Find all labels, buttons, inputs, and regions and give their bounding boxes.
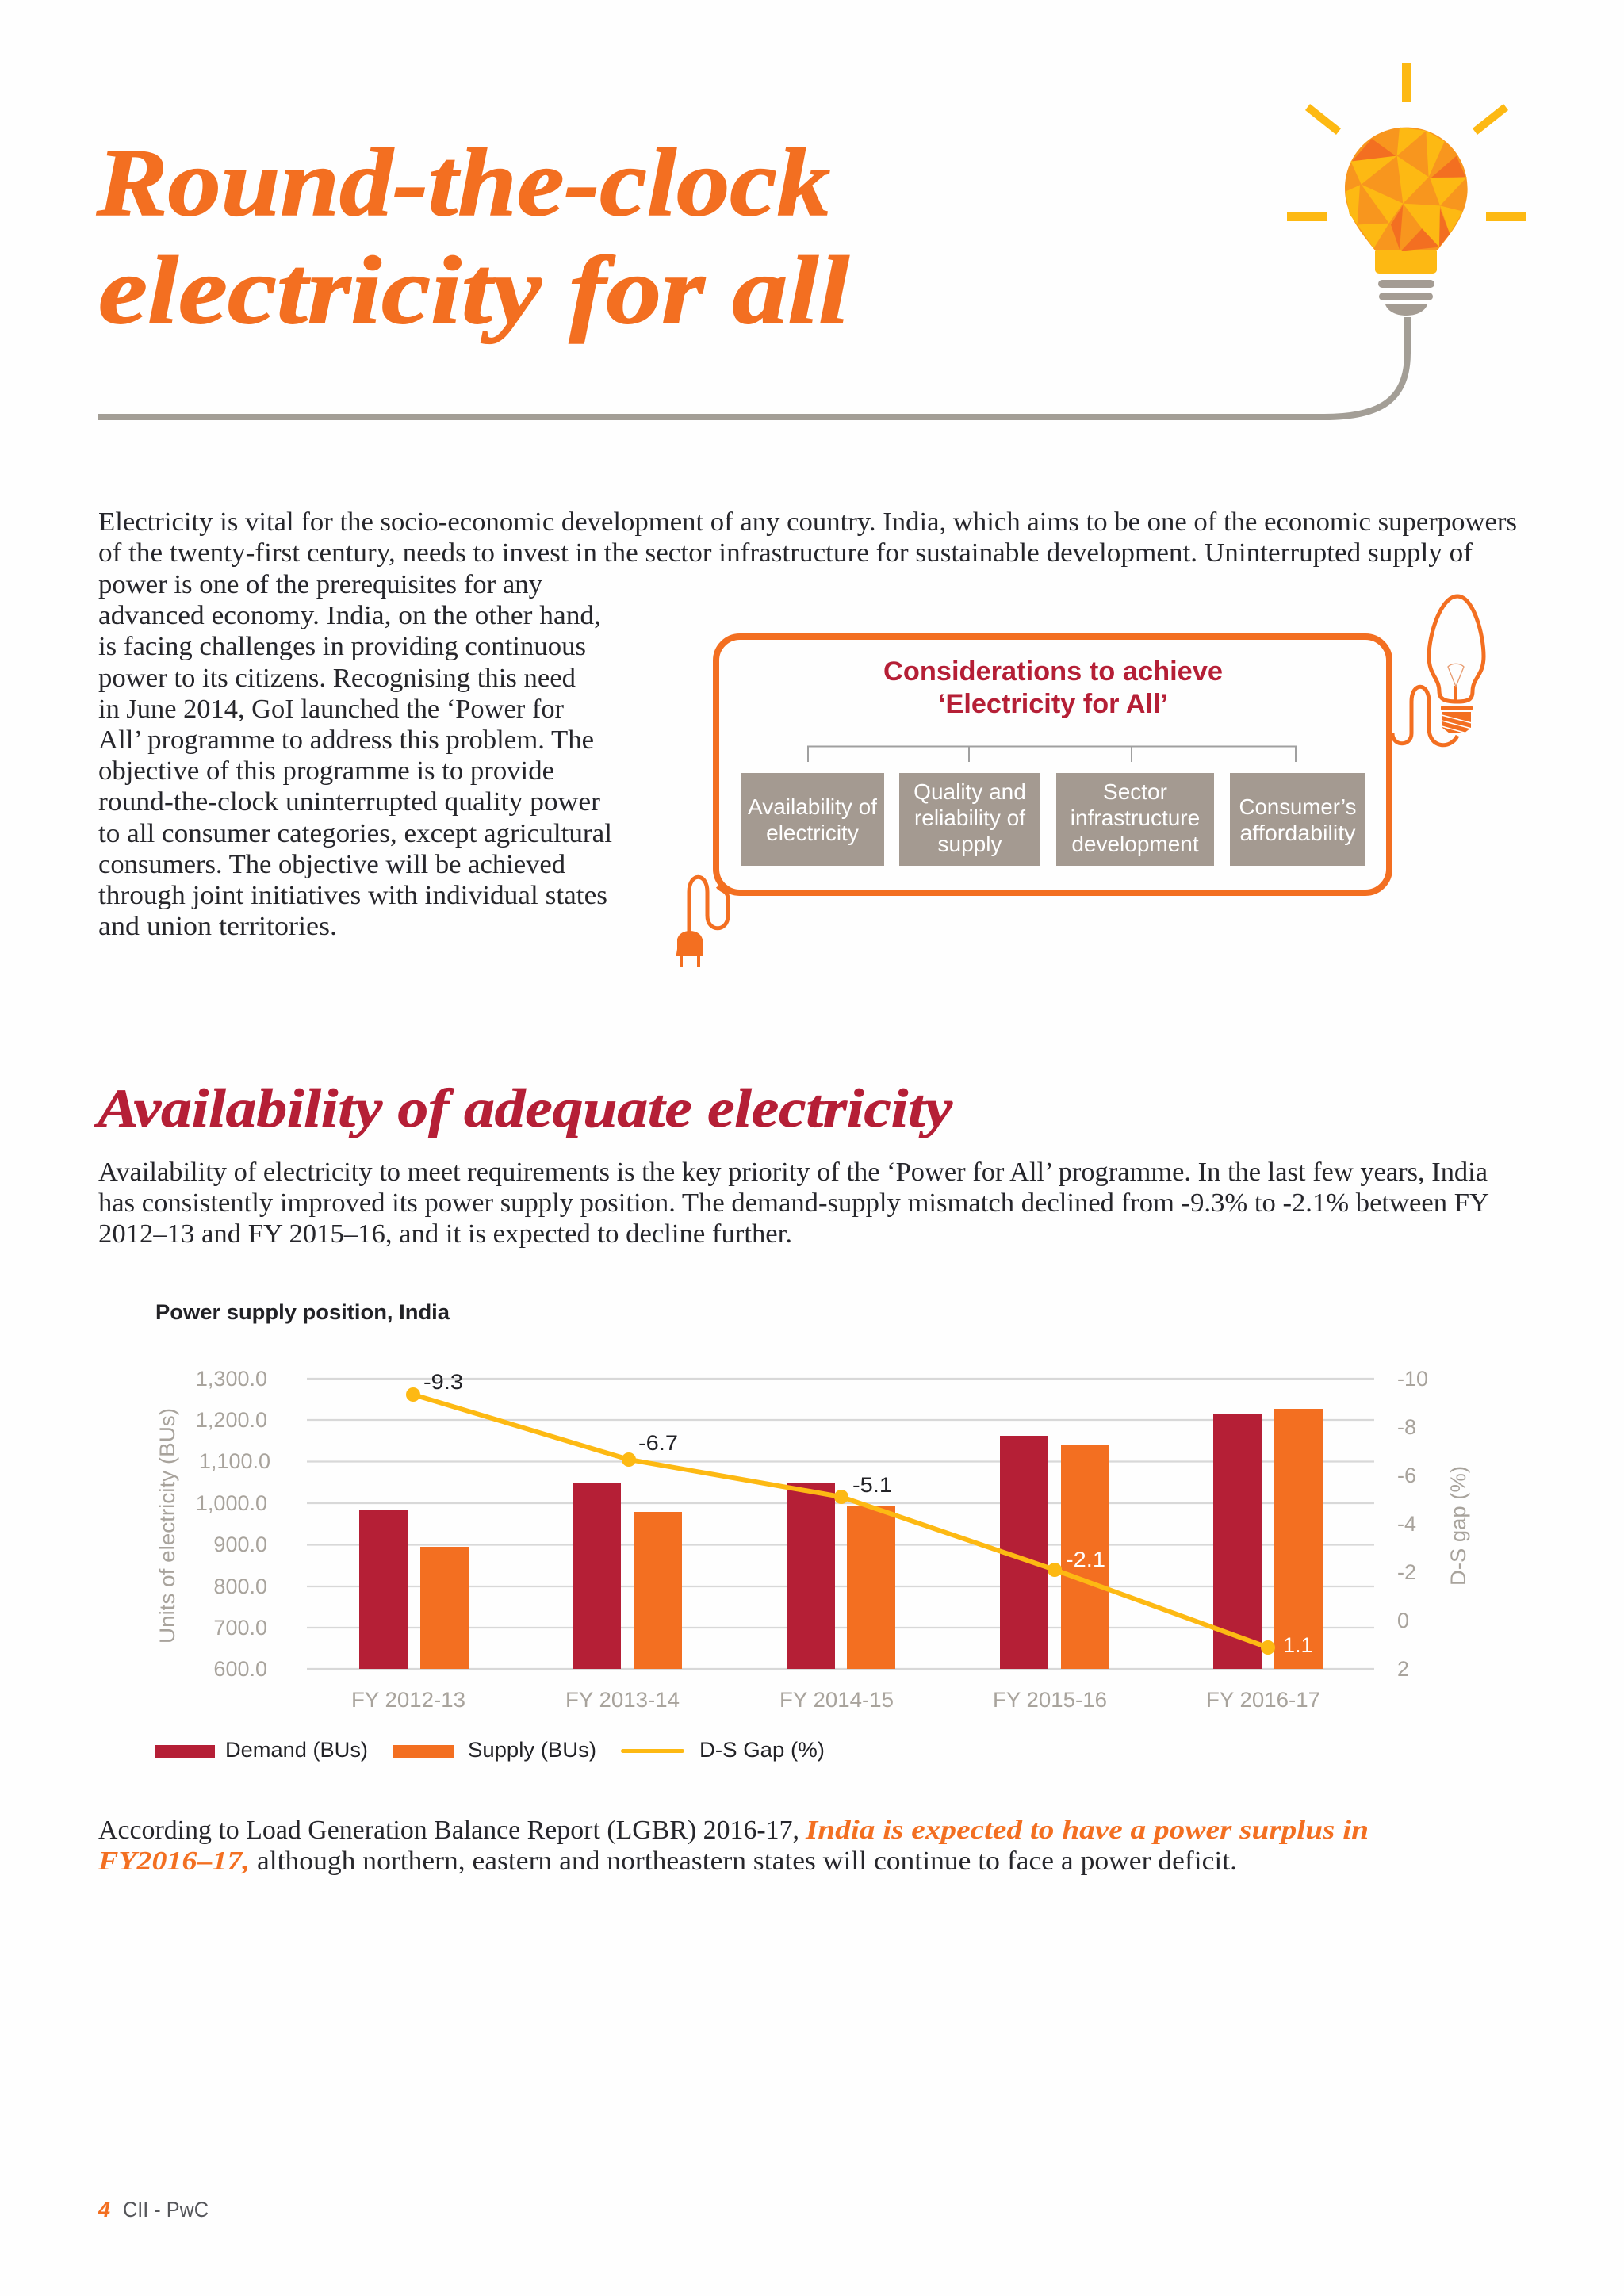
chart title: Power supply position, India: [155, 1300, 450, 1324]
data labels: [423, 1370, 1313, 1657]
text block: introduction: [98, 507, 1517, 941]
line: D-S gap: [406, 1387, 1275, 1655]
data labels: -6.7: [638, 1431, 678, 1455]
data labels: -5.1: [852, 1473, 892, 1497]
left axis labels: 1,200.0: [196, 1408, 267, 1432]
panel heading: [883, 656, 1223, 719]
text block: introduction: All’ programme to address this problem. The: [98, 725, 594, 755]
category labels: FY 2016-17: [1206, 1688, 1320, 1712]
text block: introduction: power to its citizens. Recognising this need: [98, 664, 576, 693]
text block: LGBR conclusion: According to Load Generation Balance Report (LGBR) 2016-17,: [98, 1816, 799, 1845]
box: availability of electricity: [741, 773, 884, 866]
left axis labels: 700.0: [213, 1616, 267, 1640]
text block: introduction: to all consumer categories, except agricultural: [98, 819, 612, 848]
footer: 4: [98, 2198, 110, 2221]
right axis labels: -6: [1397, 1464, 1416, 1487]
text block: introduction: is facing challenges in providing continuous: [98, 632, 586, 661]
right axis labels: -10: [1397, 1367, 1428, 1391]
left axis labels: 900.0: [213, 1533, 267, 1556]
right axis labels: -4: [1397, 1512, 1416, 1536]
panel: considerations to achieve electricity for all: [716, 637, 1389, 893]
left axis labels: 1,000.0: [196, 1491, 267, 1515]
box: availability of electricity: electricity: [766, 821, 859, 845]
text block: availability paragraph: 2012–13 and FY 2015–16, and it is expected to decline further.: [98, 1219, 792, 1249]
left axis labels: 1,300.0: [196, 1367, 267, 1391]
box: sector infrastructure development: infrastructure: [1071, 806, 1200, 830]
icon: outline bulb with cable: [1392, 596, 1484, 745]
data labels: 1.1: [1283, 1633, 1313, 1657]
legend: Supply (BUs): [468, 1738, 596, 1762]
text block: LGBR conclusion: FY2016–17,: [98, 1846, 250, 1876]
text block: availability paragraph: has consistently improved its power supply position. The demand-supply mismatch declined from -9.3% to -2.1% between FY: [98, 1188, 1489, 1218]
category labels: FY 2013-14: [565, 1688, 680, 1712]
data labels: -9.3: [423, 1370, 463, 1394]
title: [96, 129, 849, 344]
right axis labels: 0: [1397, 1609, 1409, 1632]
box: quality and reliability of supply: reliability of: [914, 806, 1025, 830]
legend: [155, 1738, 825, 1762]
footer: CII - PwC: [123, 2198, 209, 2221]
title: Round-the-clock: [96, 129, 830, 236]
bars: supply: [420, 1409, 1323, 1669]
panel heading: ‘Electricity for All’: [938, 689, 1168, 719]
legend: D-S Gap (%): [699, 1738, 825, 1762]
category labels: [351, 1688, 1320, 1712]
bars: demand: [359, 1414, 1262, 1669]
text block: introduction: consumers. The objective will be achieved: [98, 850, 565, 879]
box: quality and reliability of supply: Quality and: [914, 779, 1026, 804]
text block: introduction: advanced economy. India, on the other hand,: [98, 601, 601, 630]
text block: introduction: through joint initiatives with individual states: [98, 881, 607, 910]
heading: availability of adequate electricity: Availability of adequate electricity: [94, 1078, 952, 1138]
box: sector infrastructure development: [1056, 773, 1214, 866]
icon: glowing light bulb: [1287, 63, 1526, 316]
text block: LGBR conclusion: India is expected to have a power surplus in: [805, 1816, 1369, 1845]
box: consumer's affordability: [1230, 773, 1365, 866]
text block: availability paragraph: Availability of electricity to meet requirements is the key priority of the ‘Power for All’ programme. In the last few years, India: [98, 1158, 1488, 1187]
panel outline: [716, 637, 1389, 893]
text block: introduction: of the twenty-first century, needs to invest in the sector infrastructure for sustainable development. Uninterrupted supply of: [98, 538, 1473, 568]
right axis title: D-S gap (%): [1446, 1466, 1470, 1586]
right axis labels: 2: [1397, 1657, 1409, 1681]
left axis labels: 600.0: [213, 1657, 267, 1681]
legend: Demand (BUs): [225, 1738, 368, 1762]
text block: introduction: and union territories.: [98, 912, 337, 941]
left axis title: Units of electricity (BUs): [155, 1408, 179, 1644]
category labels: FY 2015-16: [993, 1688, 1107, 1712]
left axis labels: [196, 1367, 270, 1681]
right axis labels: -2: [1397, 1560, 1416, 1584]
text block: introduction: round-the-clock uninterrupted quality power: [98, 787, 601, 817]
text block: introduction: in June 2014, GoI launched the ‘Power for: [98, 695, 565, 724]
right axis labels: [1397, 1367, 1428, 1681]
box: sector infrastructure development: Sector: [1103, 779, 1167, 804]
box: quality and reliability of supply: [899, 773, 1040, 866]
icon: plug with cable: [676, 877, 728, 967]
title: electricity for all: [98, 237, 849, 344]
text block: introduction: objective of this programme is to provide: [98, 756, 554, 786]
panel heading: Considerations to achieve: [883, 656, 1223, 687]
left axis labels: 800.0: [213, 1575, 267, 1598]
category labels: FY 2014-15: [779, 1688, 894, 1712]
data labels: -2.1: [1066, 1548, 1105, 1571]
icon: cord from title rule to light bulb: [98, 317, 1408, 417]
box: consumer's affordability: affordability: [1240, 821, 1356, 845]
text block: introduction: power is one of the prerequisites for any: [98, 570, 542, 599]
category labels: FY 2012-13: [351, 1688, 465, 1712]
chart: power supply position, India: [155, 1300, 1470, 1762]
box: quality and reliability of supply: supply: [938, 832, 1002, 856]
right axis labels: -8: [1397, 1415, 1416, 1439]
text block: introduction: Electricity is vital for the socio-economic development of any country. India, which aims to be one of the economic superpowers: [98, 507, 1517, 537]
box: availability of electricity: Availability of: [748, 794, 877, 819]
left axis labels: 1,100.0: [199, 1449, 270, 1473]
text block: availability paragraph: [98, 1158, 1489, 1249]
text block: LGBR conclusion: [98, 1816, 1369, 1876]
box: consumer's affordability: Consumer’s: [1239, 794, 1356, 819]
box: sector infrastructure development: development: [1071, 832, 1199, 856]
text block: LGBR conclusion: although northern, eastern and northeastern states will continue to face a power deficit.: [257, 1846, 1237, 1876]
